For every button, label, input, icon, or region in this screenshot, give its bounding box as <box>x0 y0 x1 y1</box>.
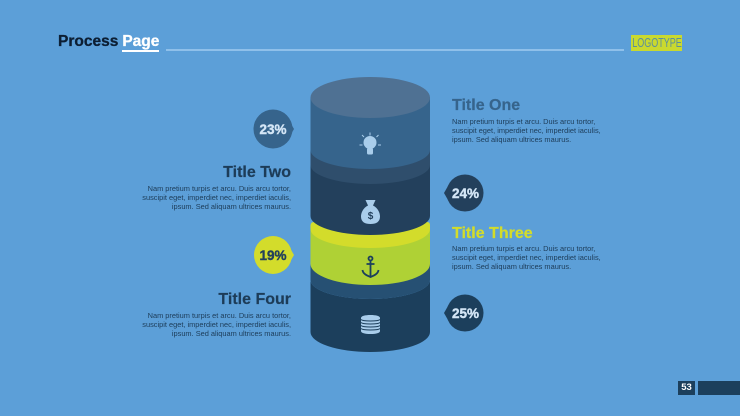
text: title one body: ipsum. Sed aliquam ultrices maurus. <box>452 135 571 144</box>
callout 24%: 24% <box>452 186 479 200</box>
callout 23% <box>254 110 294 148</box>
text: title two body: Nam pretium turpis et arcu. Duis arcu tortor, <box>148 184 291 193</box>
text: title three body: ipsum. Sed aliquam ultrices maurus. <box>452 262 571 271</box>
heading: title one: Title One <box>452 97 520 114</box>
header title: Process Page <box>58 33 159 50</box>
icon: money bag: $ <box>368 211 374 222</box>
text: title two body: suscipit eget, imperdiet nec, imperdiet iaculis, <box>142 193 291 202</box>
callout 24% <box>444 174 484 212</box>
heading: title four: Title Four <box>218 291 291 308</box>
callout 19% <box>254 236 294 274</box>
layer two <box>310 150 430 235</box>
callout 25%: 25% <box>452 306 479 321</box>
heading: title two: Title Two <box>223 164 291 181</box>
callout 25% <box>444 294 484 332</box>
logotype badge: LOGOTYPE <box>632 36 681 50</box>
header rule <box>166 49 624 51</box>
text: title four body: suscipit eget, imperdiet nec, imperdiet iaculis, <box>142 320 291 329</box>
text: title one body <box>452 117 601 144</box>
callout 23%: 23% <box>259 122 287 137</box>
icon: coins <box>361 315 380 334</box>
page number <box>678 381 695 395</box>
text: title one body: Nam pretium turpis et arcu. Duis arcu tortor, <box>452 117 595 126</box>
icon: anchor <box>362 256 378 277</box>
footer bar <box>698 381 740 395</box>
layer one <box>310 77 430 169</box>
heading: title three: Title Three <box>452 225 533 242</box>
text: title one body: suscipit eget, imperdiet nec, imperdiet iaculis, <box>452 126 601 135</box>
text: title three body: Nam pretium turpis et arcu. Duis arcu tortor, <box>452 244 595 253</box>
page number: 53 <box>681 382 692 393</box>
text: title three body: suscipit eget, imperdiet nec, imperdiet iaculis, <box>452 253 601 262</box>
callout 19%: 19% <box>259 248 287 263</box>
layer three <box>310 222 430 285</box>
text: title three body <box>452 244 601 271</box>
text: title four body <box>142 311 291 338</box>
text: title four body: Nam pretium turpis et arcu. Duis arcu tortor, <box>148 311 291 320</box>
text: title four body: ipsum. Sed aliquam ultrices maurus. <box>172 329 291 338</box>
icon: light bulb <box>360 132 381 154</box>
text: title two body: ipsum. Sed aliquam ultrices maurus. <box>172 202 291 211</box>
text: title two body <box>142 184 291 211</box>
layer four <box>310 262 430 352</box>
